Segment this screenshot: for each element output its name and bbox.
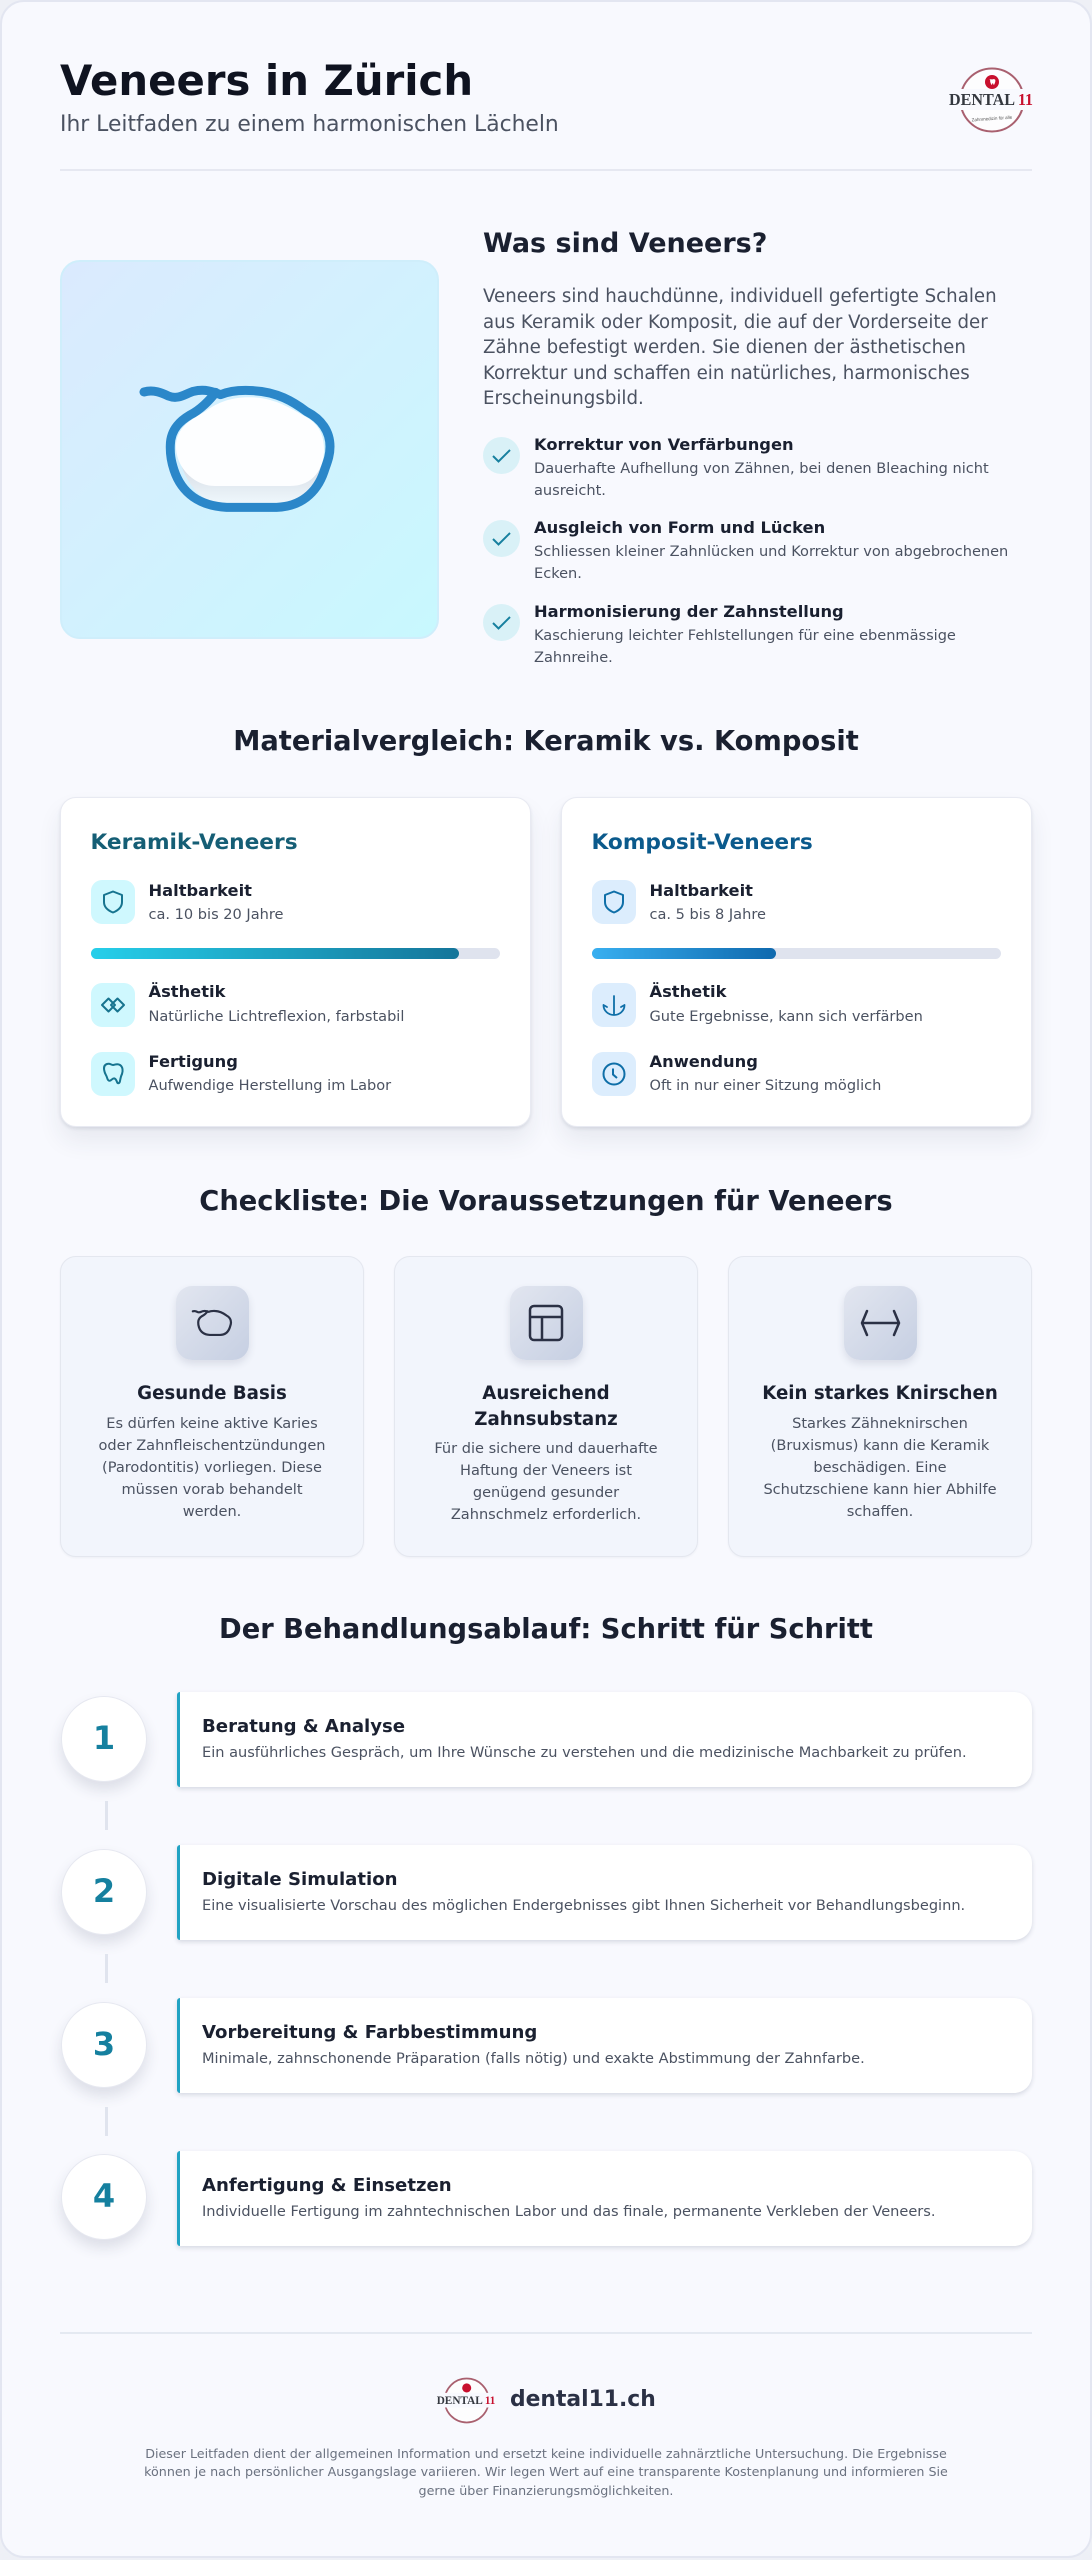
step 4 number: 4 <box>93 2177 115 2215</box>
item text <box>534 435 989 499</box>
benefit: Zahnstellung <box>483 602 956 666</box>
intro text: Korrektur und schaffen ein natürliches, harmonisches <box>483 362 970 384</box>
item text <box>534 518 1008 582</box>
text: Anwendung: Oft in nur einer Sitzung möglich <box>650 1076 881 1094</box>
step 2 card: Eine visualisierte Vorschau des möglichen Endergebnisses gibt Ihnen Sicherheit vor Behandlungsbeginn. <box>202 1897 965 1914</box>
icon: tooth <box>176 1286 248 1360</box>
text: Haltbarkeit: Haltbarkeit <box>148 880 252 900</box>
icon: layout <box>510 1286 582 1360</box>
step 1 number <box>61 1696 147 1782</box>
heading: Was sind Veneers: Was sind Veneers? <box>483 228 767 259</box>
card text: Für die sichere und dauerhafte <box>434 1440 658 1457</box>
card text: genügend gesunder <box>473 1484 619 1501</box>
progress bar: 90% <box>90 948 500 958</box>
card text: Zahnschmelz erforderlich. <box>451 1506 641 1523</box>
header divider <box>60 169 1032 171</box>
card text: Haftung der Veneers ist <box>460 1462 632 1479</box>
text: Ästhetik: Ästhetik <box>148 982 225 1000</box>
benefit: Verfärbungen <box>483 435 989 499</box>
text: Ästhetik: Natürliche Lichtreflexion, farbstabil <box>148 1008 404 1024</box>
step 4 number <box>61 2154 147 2240</box>
card text: beschädigen. Eine <box>813 1459 947 1476</box>
card heading: Kein starkes Knirschen <box>762 1383 998 1404</box>
card heading: Gesunde Basis <box>137 1383 287 1404</box>
intro text <box>483 286 997 409</box>
text: Ästhetik: Gute Ergebnisse, kann sich verfärben <box>650 1008 923 1024</box>
card text: schaffen. <box>847 1503 913 1520</box>
icon: anchor <box>592 982 636 1026</box>
step 3 number <box>61 2002 147 2088</box>
panel: Gesunde Basis <box>60 1256 364 1557</box>
footer divider <box>60 2332 1032 2334</box>
heading: Checkliste: Checkliste: Die Voraussetzungen für Veneers <box>199 1186 893 1217</box>
logo: Dental 11: 11 <box>1018 90 1033 109</box>
heading: Behandlungsablauf: Der Behandlungsablauf: Schritt für Schritt <box>219 1614 873 1645</box>
text: Ästhetik <box>650 982 923 1024</box>
icon: clock <box>592 1052 636 1096</box>
disclaimer: Dieser Leitfaden dient der allgemeinen Information und ersetzt keine individuelle zahnärztliche Untersuchung. Die Ergebnisse <box>145 2446 947 2461</box>
logo: Dental 11: Zahnmedizin für alle <box>972 115 1013 122</box>
card text: Schutzschiene kann hier Abhilfe <box>763 1481 997 1498</box>
step 3 card <box>177 1998 1032 2093</box>
panel: Komposit-Veneers <box>561 797 1032 1127</box>
item text: Kaschierung leichter Fehlstellungen für eine ebenmässige <box>534 627 956 644</box>
footer brand: dental11.ch <box>510 2387 656 2412</box>
text: Haltbarkeit <box>650 880 766 922</box>
intro text: aus Keramik oder Komposit, die auf der Vorderseite der <box>483 312 988 332</box>
panel: Keramik-Veneers <box>60 797 531 1127</box>
step 2 number: 2 <box>93 1872 115 1910</box>
card text: werden. <box>183 1503 241 1520</box>
item text: Ecken. <box>534 565 582 582</box>
icon: diamonds <box>90 982 134 1026</box>
item text: Dauerhafte Aufhellung von Zähnen, bei denen Bleaching nicht <box>534 460 989 477</box>
item text: ausreicht. <box>534 482 606 499</box>
card text: müssen vorab behandelt <box>121 1481 303 1498</box>
step 2 card <box>177 1845 1032 1940</box>
title: Veneers in Zürich <box>60 56 473 105</box>
logo: Dental 11: DENTAL <box>949 90 1015 109</box>
card heading: Ausreichend <box>482 1383 610 1404</box>
card text: oder Zahnfleischentzündungen <box>98 1437 325 1454</box>
item text: Korrektur von Verfärbungen <box>534 435 794 454</box>
icon: tooth <box>90 1052 134 1096</box>
text: Anwendung: Anwendung <box>650 1052 758 1070</box>
card text <box>98 1415 325 1520</box>
footer logo <box>436 2378 496 2424</box>
panel heading: Komposit-Veneers <box>592 830 813 854</box>
disclaimer: gerne über Finanzierungsmöglichkeiten. <box>419 2483 673 2498</box>
logo: Dental 11 <box>949 68 1033 132</box>
intro text: Erscheinungsbild. <box>483 388 644 409</box>
step 3 card: Vorbereitung & Farbbestimmung <box>202 2022 537 2043</box>
text: Haltbarkeit: ca. 10 bis 20 Jahre <box>148 906 283 922</box>
step 3 number: 3 <box>93 2025 115 2063</box>
card text: Starkes Zähneknirschen <box>792 1415 968 1432</box>
panel: Ausreichend Zahnsubstanz <box>394 1256 698 1557</box>
card text <box>763 1415 997 1520</box>
text: Anwendung <box>650 1052 881 1094</box>
icon: check <box>483 604 520 641</box>
disclaimer: können je nach persönlicher Ausgangslage variieren. Wir legen Wert auf eine transparente Kostenplanung und informieren Sie <box>144 2464 948 2479</box>
step 4 card <box>177 2151 1032 2246</box>
step 4 card: Individuelle Fertigung im zahntechnischen Labor und das finale, permanente Verkleben der Veneers. <box>202 2203 935 2220</box>
step 1 card <box>177 1692 1032 1787</box>
icon: width arrows <box>844 1286 916 1360</box>
benefit: Form und Lücken <box>483 518 1008 582</box>
subtitle: Ihr Leitfaden zu einem harmonischen Lächeln <box>60 112 559 137</box>
item text: Ausgleich von Form und Lücken <box>534 518 825 537</box>
text: Haltbarkeit <box>148 880 283 922</box>
card text: (Parodontitis) vorliegen. Diese <box>102 1459 322 1476</box>
item text: Harmonisierung der Zahnstellung <box>534 602 844 621</box>
footer logo: DENTAL <box>437 2395 483 2407</box>
text: Haltbarkeit: Haltbarkeit <box>650 880 753 900</box>
intro text: Veneers sind hauchdünne, individuell gefertigte Schalen <box>483 286 997 307</box>
intro text: Zähne befestigt werden. Sie dienen der ästhetischen <box>483 337 966 358</box>
disclaimer <box>144 2446 948 2498</box>
text: Fertigung <box>148 1052 392 1094</box>
card text <box>434 1440 658 1523</box>
benefit list <box>483 435 1008 666</box>
item text: Schliessen kleiner Zahnlücken und Korrektur von abgebrochenen <box>534 543 1008 560</box>
card heading <box>474 1383 618 1430</box>
panel heading: Keramik-Veneers <box>90 830 298 854</box>
step 1 card: Ein ausführliches Gespräch, um Ihre Wünsche zu verstehen und die medizinische Machbarkeit zu prüfen. <box>202 1744 967 1761</box>
step 2 number <box>61 1849 147 1935</box>
icon: shield <box>90 880 134 924</box>
panel: Kein starkes Knirschen <box>728 1256 1032 1557</box>
text: Haltbarkeit: ca. 5 bis 8 Jahre <box>650 906 766 922</box>
text: Fertigung: Aufwendige Herstellung im Labor <box>148 1076 391 1094</box>
heading: Materialvergleich: Materialvergleich: Keramik vs. Komposit <box>233 726 859 757</box>
step 2 card: Digitale Simulation <box>202 1869 398 1890</box>
icon: check <box>483 520 520 557</box>
footer logo: 11 <box>485 2395 496 2407</box>
step 3 card: Minimale, zahnschonende Präparation (falls nötig) und exakte Abstimmung der Zahnfarbe. <box>202 2050 865 2067</box>
step 1 card: Beratung & Analyse <box>202 1716 405 1737</box>
progress bar: 45% <box>592 948 1000 958</box>
item text: Zahnreihe. <box>534 649 613 666</box>
text: Ästhetik <box>148 982 404 1024</box>
card heading: Zahnsubstanz <box>474 1409 618 1430</box>
item text <box>534 602 956 666</box>
step 1 number: 1 <box>93 1719 115 1757</box>
step 4 card: Anfertigung & Einsetzen <box>202 2175 452 2196</box>
icon: check <box>483 437 520 474</box>
text: Ästhetik: Ästhetik <box>650 982 726 1000</box>
illustration: veneer tooth <box>60 260 439 639</box>
card text: (Bruxismus) kann die Keramik <box>771 1437 989 1454</box>
card text: Es dürfen keine aktive Karies <box>106 1415 318 1432</box>
icon: shield <box>592 880 636 924</box>
text: Fertigung: Fertigung <box>148 1052 238 1070</box>
